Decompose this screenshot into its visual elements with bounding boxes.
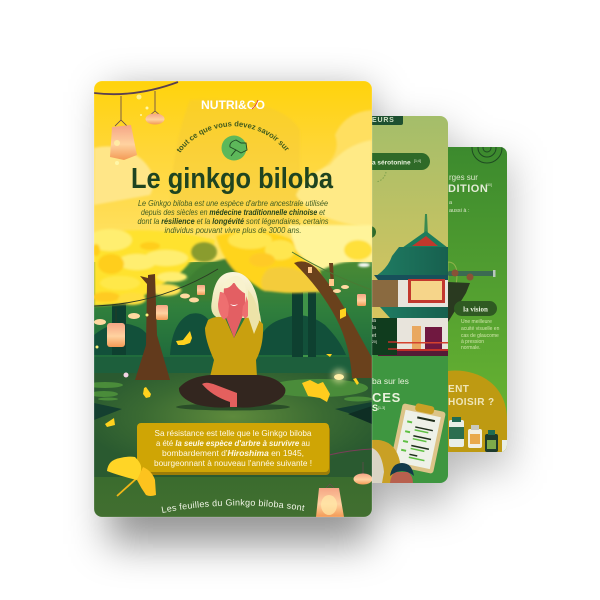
product bottles: [449, 417, 507, 452]
dark side panel: et: [372, 333, 377, 339]
ground back band: [94, 357, 372, 373]
middle heading: S: [372, 403, 378, 413]
dark bushes: [94, 313, 346, 355]
green side shape: [372, 226, 376, 238]
vision text: [461, 319, 500, 351]
mustard panel: [448, 371, 507, 452]
curved subtitle: tout ce que vous devez savoir sur: [176, 120, 289, 152]
hair back: [211, 272, 262, 335]
vision text: normale.: [461, 345, 480, 351]
dark side panel: [372, 318, 397, 355]
pill: la vision: [454, 301, 497, 316]
callout: Hiroshima: Sa résistance est telle que le Ginkgo biloba: [154, 428, 312, 438]
vision text: cas de glaucome: [461, 333, 499, 339]
background light band: [303, 292, 308, 357]
smile: [230, 304, 238, 306]
soft drop shadow: [108, 92, 510, 544]
right tree trunk: [294, 261, 372, 378]
left base foliage: [94, 230, 215, 306]
back card heading: [448, 176, 492, 212]
tag heading: EURS: [372, 117, 395, 124]
pill: sérotonine: a sérotonine: [372, 160, 411, 166]
right pale foliage: [288, 225, 372, 270]
vision text: acuité visuelle en: [461, 326, 500, 332]
middle heading: ba sur les: [372, 376, 409, 386]
vision text: Une meilleure: [461, 319, 492, 325]
middle card: [372, 116, 448, 483]
hair front: [248, 290, 259, 334]
foliage fold: [261, 267, 321, 292]
foot and shin: [202, 383, 237, 407]
back card heading: aussi à :: [449, 208, 470, 214]
main card: [94, 81, 372, 517]
ground: [94, 372, 372, 478]
dark side panel: la: [372, 318, 376, 324]
intro paragraph: depuis des siècles en médecine traditionnelle chinoise et: [141, 207, 326, 217]
dashed arc: [376, 172, 386, 182]
icon: green ginkgo circle: [222, 136, 247, 160]
neck and face: [223, 283, 245, 338]
lantern small: [146, 114, 164, 124]
left lower scallops: [92, 276, 181, 305]
foliage canopy: [88, 225, 372, 306]
olive gap and green opening: [180, 258, 237, 294]
hair fringe: [222, 276, 246, 294]
back card heading: [30]: [486, 183, 492, 187]
dark side panel: [20]: [371, 340, 377, 344]
hands on cheeks: [218, 292, 249, 320]
floating leaves: [105, 308, 359, 427]
sweater: [205, 317, 263, 377]
middle heading: [1-3]: [378, 406, 385, 410]
title: Le ginkgo biloba: [131, 163, 334, 195]
sky: [94, 81, 372, 262]
background trunks: [112, 292, 316, 357]
sparkles: [114, 94, 148, 165]
big ginkgo leaf: [107, 457, 156, 496]
logo: NUTRI&CO: [201, 100, 265, 112]
vision text: à pression: [461, 339, 484, 345]
left tree trunk: [135, 274, 170, 380]
infographic mockup: three stacked cards: [81, 65, 532, 571]
intro paragraph: individus pouvant vivre plus de 3000 ans.: [164, 225, 302, 235]
central foliage: [216, 231, 321, 293]
back card heading: DITION: [448, 183, 488, 195]
shadow under legs: [176, 404, 290, 410]
middle heading: CES: [372, 390, 401, 405]
person with shirt: [372, 440, 414, 483]
small lantern right: [354, 462, 372, 484]
icon: concentric circles: [472, 147, 502, 164]
lower ground: [94, 477, 372, 517]
back card heading: a: [449, 200, 453, 206]
glowing lights: [96, 314, 346, 383]
woman meditating: [176, 272, 290, 410]
panel heading: ENT: [448, 384, 469, 395]
callout: Hiroshima: a été la seule espèce d'arbre à survivre au: [156, 438, 310, 448]
main card border: [94, 81, 372, 517]
lantern large: [110, 125, 137, 160]
panel heading: [448, 385, 494, 405]
crossed legs: [179, 375, 285, 408]
pale clouds: [94, 100, 372, 240]
callout: Hiroshima: [137, 423, 330, 475]
middle heading: [372, 378, 409, 411]
dark side panel: la: [372, 325, 376, 331]
pagoda: [372, 214, 448, 356]
left deep yellow clumps: [92, 242, 160, 274]
top lights and rope: [94, 82, 178, 165]
pill: la vision: la vision: [463, 306, 488, 314]
strings of lights: [94, 252, 372, 455]
back card heading: rges sur: [449, 173, 478, 182]
callout: Hiroshima: bombardement d'Hiroshima en 1945,: [162, 448, 304, 458]
tag heading: [372, 116, 403, 125]
panel heading: HOISIR ?: [448, 397, 495, 408]
callout: Hiroshima: bourgeonnant à nouveau l'année suivante !: [154, 458, 312, 468]
clipboard: [394, 403, 446, 474]
bottom lantern: [316, 484, 344, 517]
pill: sérotonine: [372, 153, 430, 170]
intro paragraph: [138, 198, 328, 235]
back card: [448, 147, 507, 452]
left highlights: [88, 229, 188, 282]
pill: sérotonine: [1;4]: [414, 159, 421, 163]
intro paragraph: dont la résilience et la longévité sont légendaires, certains: [138, 216, 328, 226]
ground patches: [87, 379, 372, 424]
bottom caption: Les feuilles du Ginkgo biloba sont: [162, 499, 305, 513]
telescope: [448, 262, 496, 322]
intro paragraph: Le Ginkgo biloba est une espèce d'arbre ancestrale utilisée: [138, 198, 328, 208]
hanging lanterns: [94, 267, 366, 347]
forest background: [94, 262, 372, 360]
